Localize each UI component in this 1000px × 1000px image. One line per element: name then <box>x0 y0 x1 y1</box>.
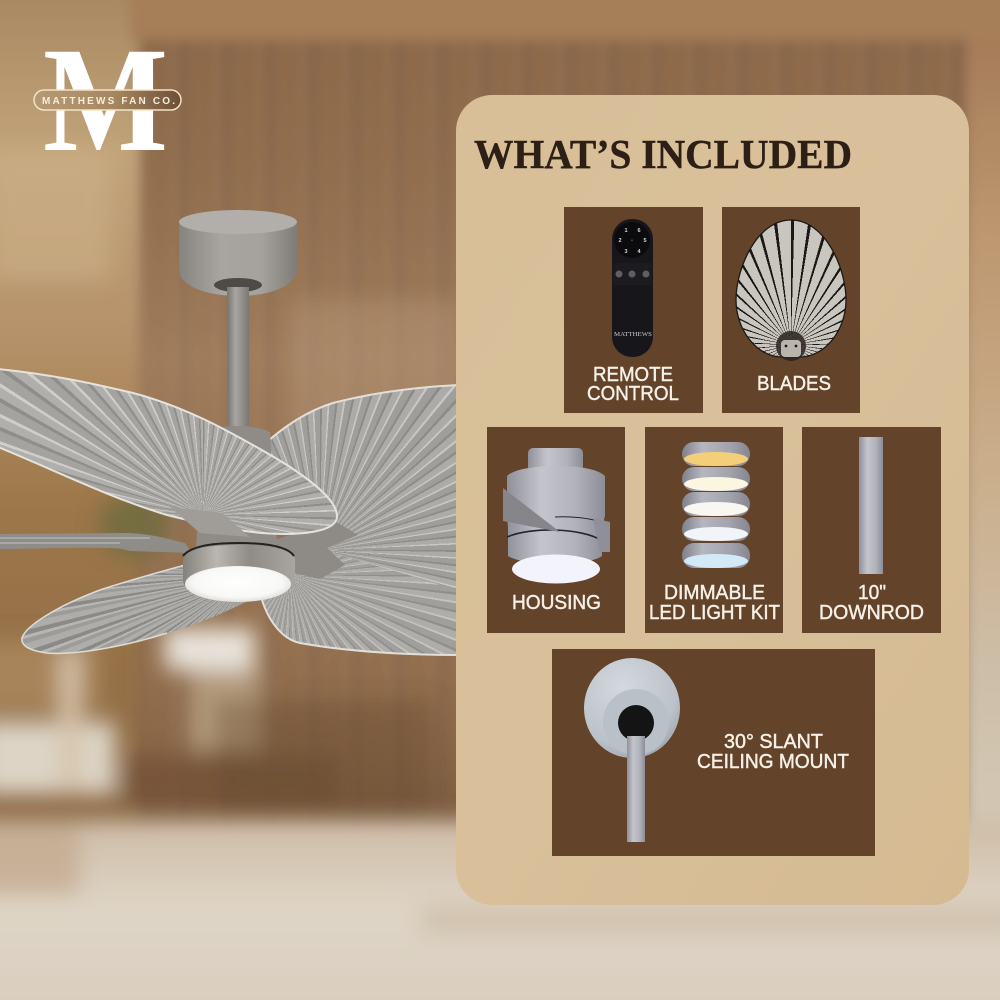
label <box>587 364 679 405</box>
label: LED LIGHT KIT <box>649 602 780 624</box>
motor body <box>195 426 278 560</box>
blade outline details <box>260 385 458 655</box>
fan blade: lower right <box>263 555 456 654</box>
label: BLADES <box>757 373 831 395</box>
label: DOWNROD <box>819 602 924 624</box>
icon: remote: 5 <box>643 238 647 244</box>
label: CONTROL <box>587 383 679 405</box>
heading: WHAT’S INCLUDED <box>474 131 852 177</box>
icon: remote: ◦ <box>631 238 633 244</box>
ceiling canopy <box>179 210 297 296</box>
fan blade: lower left <box>22 566 247 653</box>
label <box>649 582 780 624</box>
downrod <box>227 287 249 437</box>
icon: remote: 6 <box>637 228 641 234</box>
label: 30° SLANT <box>724 731 823 753</box>
card: downrod <box>802 427 941 633</box>
icon: slant mount <box>584 658 680 842</box>
label: 10" <box>858 582 886 604</box>
icon: remote: 2 <box>618 238 622 244</box>
logo: Matthews Fan Co.: M <box>43 17 168 183</box>
card: housing <box>487 427 625 633</box>
bracket: right <box>275 520 358 579</box>
card: remote control <box>564 207 703 413</box>
icon: remote: 1 <box>624 228 628 234</box>
card: blades <box>722 207 860 413</box>
fan blade: far left edge-on <box>0 533 185 553</box>
label: REMOTE <box>593 364 673 386</box>
icon: downrod <box>859 437 883 574</box>
motor housing and light <box>183 543 295 602</box>
fan blade: upper right <box>270 386 456 590</box>
label <box>819 582 924 624</box>
bracket: left blade arm <box>110 543 192 553</box>
ceiling fan <box>0 210 460 660</box>
panel: what's included <box>456 95 969 905</box>
icon: remote: MATTHEWS <box>614 332 652 338</box>
bracket: top blade arm <box>170 507 250 537</box>
icon: remote <box>612 219 653 357</box>
fan blade: upper left <box>0 365 340 540</box>
logo: Matthews Fan Co.: MATTHEWS FAN CO. <box>42 96 175 107</box>
label: CEILING MOUNT <box>697 751 849 773</box>
label: HOUSING <box>512 592 601 614</box>
card: slant ceiling mount <box>552 649 875 856</box>
label <box>697 731 849 773</box>
icon: motor housing <box>503 448 610 584</box>
icon: LED colour pucks <box>682 442 750 568</box>
label: DIMMABLE <box>664 582 765 604</box>
icon: remote: 4 <box>637 249 641 255</box>
icon: palm blade <box>735 219 847 361</box>
card: dimmable LED light kit <box>645 427 783 633</box>
icon: remote: 3 <box>624 249 628 255</box>
